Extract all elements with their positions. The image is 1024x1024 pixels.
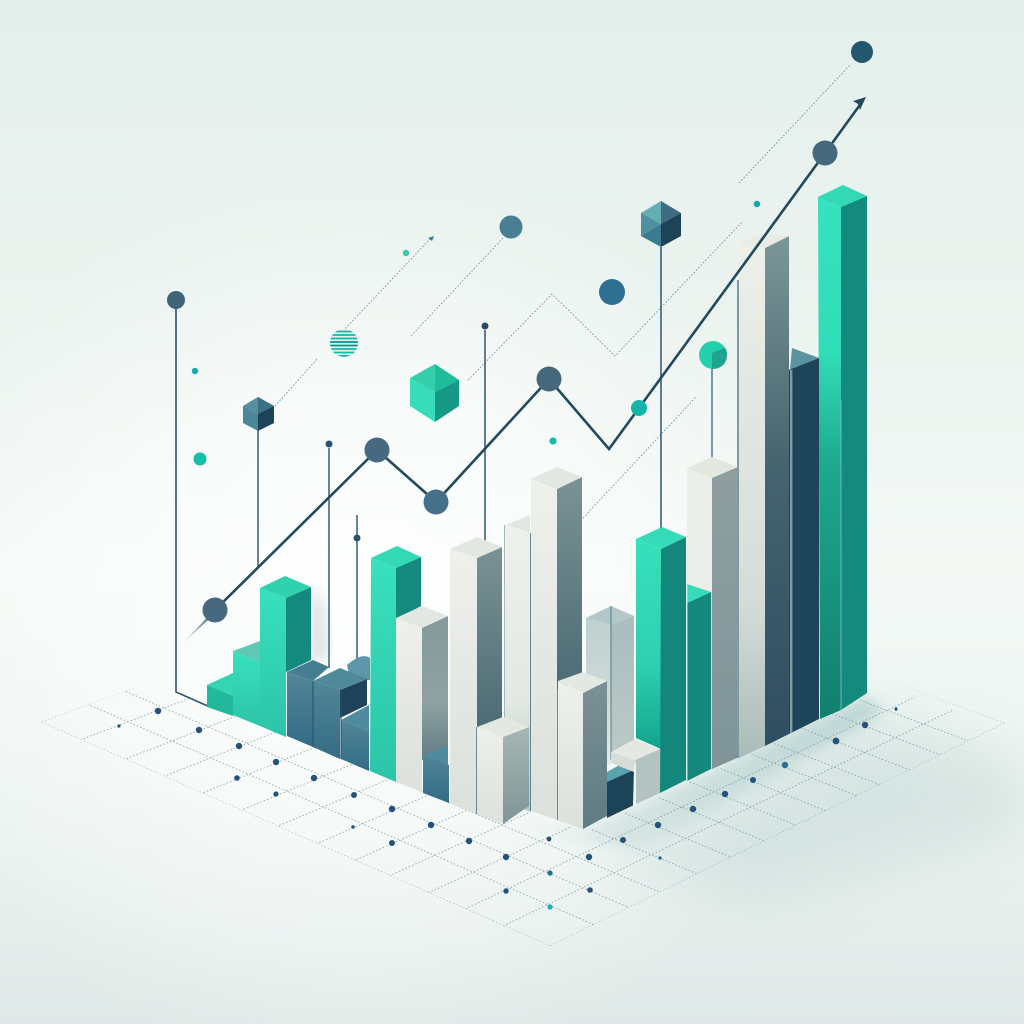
bar: small white [611, 739, 660, 806]
bar: teal left group [207, 576, 311, 737]
vertical marker stems [258, 247, 712, 670]
striped circle [330, 329, 358, 357]
floor shadow [520, 697, 1024, 900]
bar shadow on backdrop [311, 590, 328, 665]
floor grid [41, 683, 1005, 946]
bar: white low centre [476, 717, 529, 824]
bar: navy [789, 348, 819, 734]
large teal hexagon [410, 364, 459, 422]
arrowhead [853, 97, 866, 110]
axis frame line [176, 305, 210, 707]
bar: far-right teal [818, 185, 867, 719]
bar: blue cluster [287, 656, 370, 771]
bar: low white right [557, 672, 607, 829]
bar: teal left tall [370, 546, 421, 782]
bar: tallest white [530, 467, 582, 820]
small blue hexagon [243, 397, 274, 431]
teal orb with cube notch [699, 341, 727, 369]
chart nodes [202, 140, 838, 622]
bar: white behind [504, 515, 530, 812]
bar: pale translucent [586, 606, 634, 765]
floor dots [117, 707, 898, 910]
bar: dark grey [765, 236, 789, 746]
line chart: rising trend [183, 102, 862, 643]
small arrowhead on dotted line [428, 236, 434, 241]
bar: tall white strip [738, 233, 789, 758]
blue hexagon [641, 201, 681, 247]
bar: white left [396, 606, 448, 792]
bar: mid teal [687, 584, 712, 781]
bar: tall teal [636, 527, 687, 793]
teal accent dots [192, 201, 760, 466]
floating circles [167, 41, 873, 542]
bar: white tall centre [450, 537, 502, 814]
bar: small dark [607, 758, 634, 818]
dotted trend lines [275, 64, 851, 518]
bar: small blue [423, 746, 449, 803]
bar: white with grey side [687, 457, 738, 769]
